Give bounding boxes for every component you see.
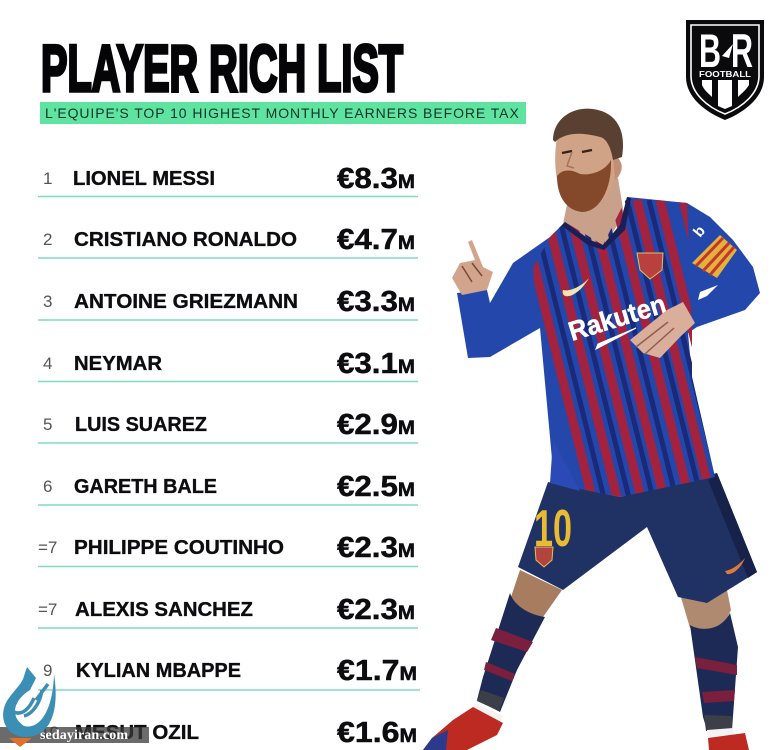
row 10: MESUT OZIL [75,722,199,744]
legs [472,570,738,738]
nose [567,152,574,168]
row 9 [43,655,417,687]
sponsor: Rakuten [565,289,669,347]
row 10: €1.6 M [337,717,417,749]
row 7: =7 [38,538,57,557]
row 10 [40,717,417,749]
row 5: €2.9M [337,409,415,441]
row 5 [43,409,415,441]
row 3: ANTOINE GRIEZMANN [74,291,298,313]
jersey [457,197,760,510]
row 8: ALEXIS SANCHEZ [75,599,253,621]
row 2: CRISTIANO RONALDO [74,229,297,251]
ear [613,157,621,180]
row 9: KYLIAN MBAPPE [76,660,241,682]
row 7: €2.3M [337,532,415,564]
number 10: 10 [534,500,572,558]
row 6: 6 [43,477,52,496]
captain armband [692,235,737,278]
row 6 [43,471,415,503]
B/R football logo: B [699,24,721,77]
row 1: €8.3M [337,163,415,195]
row 1: 1 [43,169,52,188]
row 7: PHILIPPE COUTINHO [74,537,284,559]
row 4 [43,348,415,380]
pointing hand [452,240,493,295]
B/R football logo [686,20,764,120]
row 7 [38,532,415,564]
player figure [423,109,760,750]
icon: calligraphy emblem [3,667,56,737]
icon: orange marker [9,738,32,747]
hand on jersey [630,302,695,358]
eyes [562,150,592,153]
row 5: 5 [43,415,52,434]
row 6: GARETH BALE [74,476,217,498]
hair [553,109,623,160]
row 3: 3 [43,292,52,311]
title: PLAYER RICH LIST [41,31,403,105]
B/R football logo: FOOTBALL [699,70,751,79]
row 5: LUIS SUAREZ [75,414,207,436]
watermark [0,667,149,747]
watermark: sedayiran.com [40,728,128,743]
boots [423,707,749,750]
shorts crest [535,547,553,567]
nike swoosh [563,278,589,296]
row 8 [38,594,415,626]
row 4: 4 [43,354,52,373]
B/R football logo: R [731,24,753,77]
jersey stripes [533,198,714,497]
row 9: 9 [43,661,52,680]
lower hem panel [550,440,580,491]
subtitle banner: L'EQUIPE'S TOP 10 HIGHEST MONTHLY EARNERS BEFORE TAX [45,105,520,121]
club crest [637,253,663,279]
collar [562,197,631,250]
row 4: NEYMAR [74,353,163,375]
row 1: LIONEL MESSI [73,168,215,190]
row 3 [43,286,415,318]
row 6: €2.5M [337,471,415,503]
row 8: =7 [38,600,57,619]
row 4: €3.1M [337,348,415,380]
shorts swoosh [725,558,745,574]
row 2: 2 [43,230,52,249]
sleeve sponsor: b [690,223,709,241]
row 9: €1.7 M [337,655,417,687]
beard [557,160,611,212]
row 2: €4.7M [337,224,415,256]
row 3: €3.3M [337,286,415,318]
armpit gap [698,285,718,300]
row 8: €2.3M [337,594,415,626]
row 10: 10 [40,723,59,742]
neck [563,178,624,247]
row 2 [43,224,415,256]
head [553,109,623,212]
ranking list [38,163,420,749]
row 1 [43,163,415,195]
shorts [518,473,757,603]
